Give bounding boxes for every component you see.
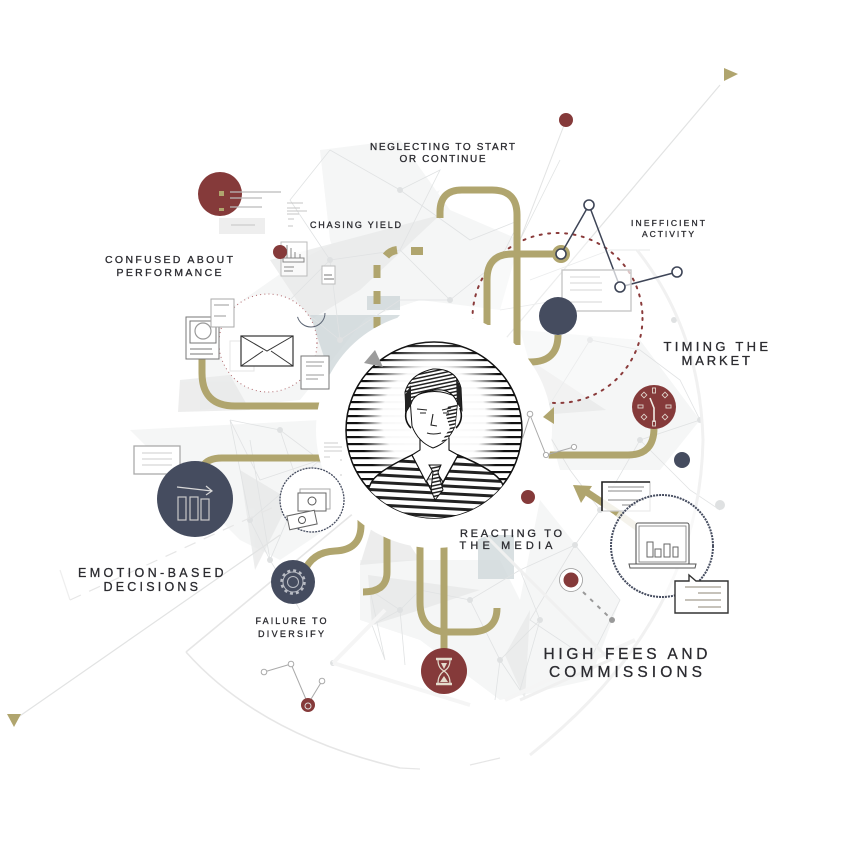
label: commissions: COMMISSIONS — [549, 664, 705, 681]
man's face shading — [440, 404, 457, 444]
man's face — [410, 392, 458, 448]
label: market: MARKET — [682, 353, 752, 368]
label: reacting to: REACTING TO — [460, 528, 564, 540]
label: decisions: DECISIONS — [104, 580, 200, 594]
label: failure to: FAILURE TO — [256, 616, 328, 626]
grey pointer triangle — [364, 350, 383, 367]
label: performance: PERFORMANCE — [116, 267, 224, 279]
label: high fees and: HIGH FEES AND — [544, 646, 710, 663]
icon: speech bubble behind emotion node — [134, 446, 180, 474]
portrait medallion — [346, 339, 522, 530]
label: the media: THE MEDIA — [460, 540, 554, 552]
man's tie — [429, 465, 443, 500]
node: confused about performance red circle — [198, 172, 307, 234]
long diagonal line — [14, 85, 720, 720]
small node graph — [261, 661, 325, 712]
node: failure to diversify gear — [271, 560, 315, 604]
label: emotion-based: EMOTION-BASED — [78, 566, 226, 580]
line graph: inefficient activity — [552, 200, 682, 287]
gold pointer triangle — [543, 407, 554, 424]
large orbit arcs — [530, 250, 703, 755]
node: emotion-based decisions — [157, 461, 233, 537]
man's sweater — [368, 454, 503, 518]
icon: small document — [322, 266, 335, 284]
icon: envelope group — [186, 294, 329, 392]
label: neglecting to start: NEGLECTING TO START — [370, 142, 517, 153]
target node with dashed tail — [560, 568, 615, 623]
man's eyes, nose and mouth — [417, 408, 451, 434]
document near centre — [324, 443, 342, 475]
icon: document with chart — [273, 242, 307, 276]
man's ears — [406, 408, 461, 428]
red dot near reacting label — [521, 490, 535, 504]
label: chasing yield: CHASING YIELD — [310, 220, 403, 230]
label: diversify: DIVERSIFY — [258, 629, 326, 639]
label: timing the: TIMING THE — [664, 339, 770, 354]
label: confused about: CONFUSED ABOUT — [105, 254, 235, 266]
background network mesh — [14, 85, 725, 769]
start triangle marker — [7, 714, 21, 727]
blue-grey tint panels — [310, 296, 514, 579]
small navy node — [674, 452, 690, 468]
laptop circle — [611, 495, 713, 597]
speech bubble above laptop — [602, 482, 650, 511]
icon: money circle — [280, 468, 344, 532]
node: hourglass — [421, 648, 467, 694]
label: inefficient: INEFFICIENT — [631, 218, 707, 228]
white centre disc — [316, 312, 552, 548]
man's hair — [405, 369, 462, 412]
arrow: laptop to centre — [573, 485, 638, 528]
label: or continue: OR CONTINUE — [400, 154, 488, 165]
red dotted ring — [472, 233, 642, 403]
speech bubble and navy node — [539, 270, 631, 335]
label: activity: ACTIVITY — [642, 229, 696, 239]
node: clock — [632, 385, 676, 429]
gold connector paths — [202, 190, 654, 652]
speech bubble below laptop — [675, 575, 728, 613]
small network nodes near clock path — [522, 411, 577, 458]
man's neck and collar — [412, 438, 458, 482]
top red dot — [559, 113, 573, 127]
end triangle marker — [724, 68, 738, 81]
